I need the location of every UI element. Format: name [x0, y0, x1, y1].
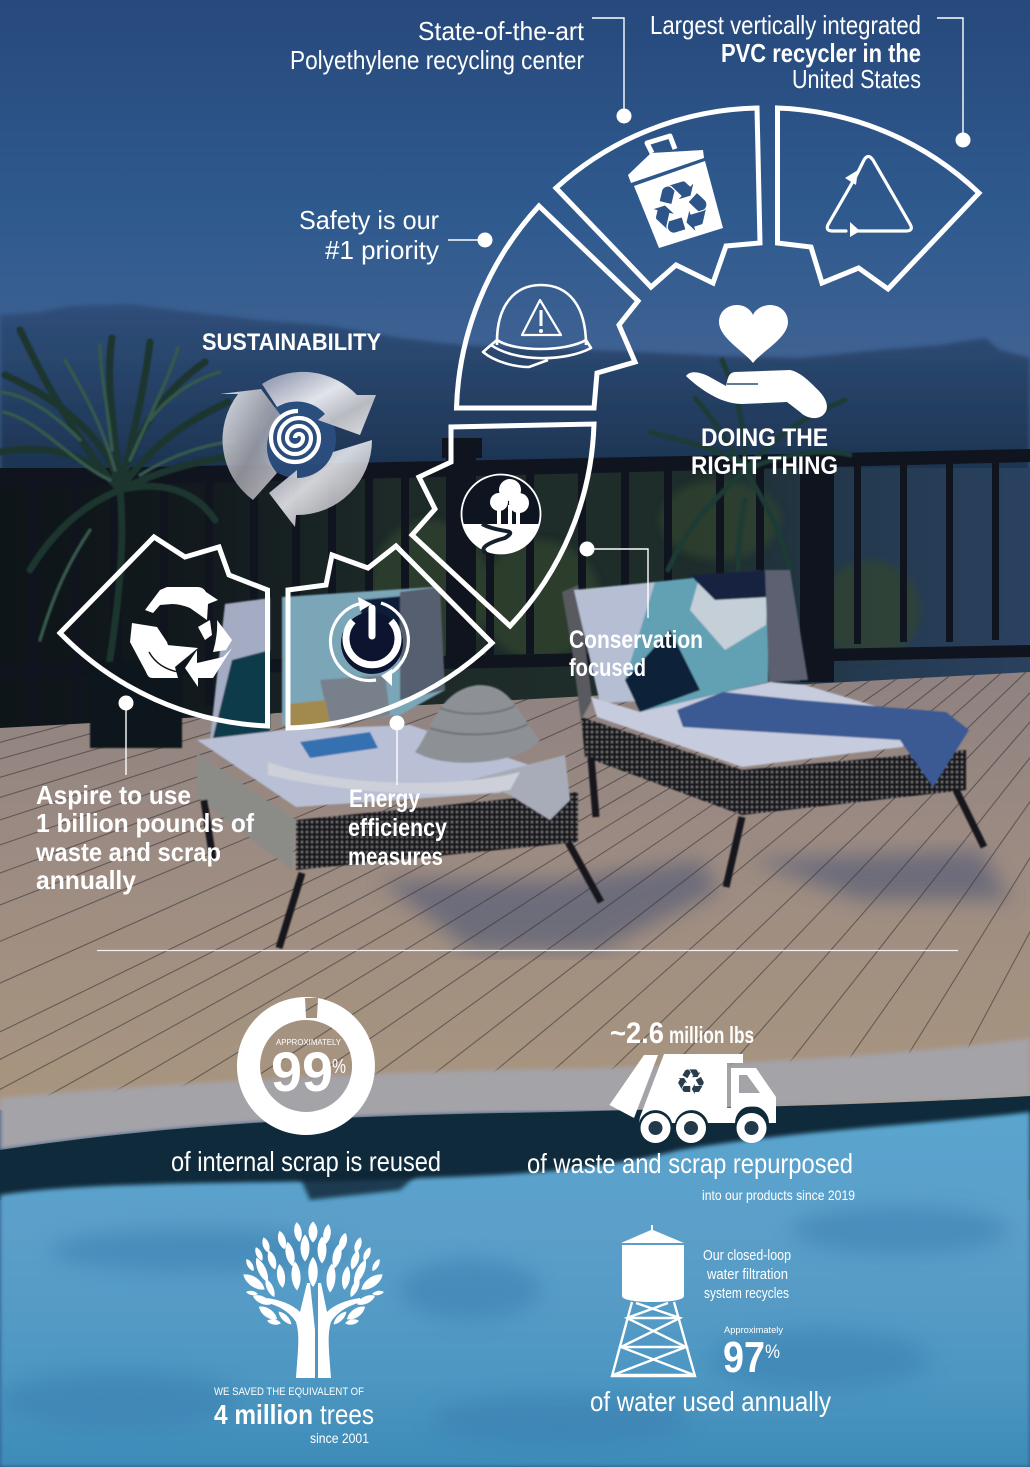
text: aspire: annually — [36, 865, 137, 895]
stat: water recycling: Approximately — [724, 1325, 784, 1335]
connector: polyethylene — [592, 18, 632, 124]
connector: PVC recycler — [937, 18, 970, 148]
stat: 99 percent scrap: of internal scrap is reused — [171, 1146, 441, 1177]
stat: waste repurposed truck: ~2.6 — [610, 1017, 664, 1050]
deck — [0, 672, 1030, 1110]
text: conservation focused: focused — [569, 654, 646, 682]
icon: garbage truck: ♻ — [675, 1063, 707, 1103]
segment: waste and scrap — [60, 537, 268, 726]
icon: garbage truck — [610, 1054, 776, 1143]
icon: power with cycle arrows — [330, 597, 408, 686]
text: conservation focused: Conservation — [569, 626, 703, 654]
stat: water recycling: of water used annually — [590, 1386, 831, 1417]
stat: water recycling — [590, 1225, 831, 1417]
stat: waste repurposed truck: of waste and scrap repurposed — [527, 1148, 853, 1179]
stat: 4 million trees: trees — [320, 1399, 374, 1430]
stat: water recycling: system recycles — [704, 1285, 789, 1302]
stat: 4 million trees: WE SAVED THE EQUIVALENT OF — [214, 1386, 364, 1398]
icon: recycle bin: ♻ — [637, 159, 724, 259]
heading: doing the right thing: RIGHT THING — [691, 452, 838, 480]
stat: 99 percent scrap: APPROXIMATELY — [276, 1038, 342, 1047]
stat: waste repurposed truck: million lbs — [669, 1022, 754, 1048]
text: aspire — [35, 780, 254, 895]
segment: recycling bin — [556, 108, 760, 287]
icon: globe recycle — [130, 587, 232, 687]
segment: energy — [288, 546, 492, 728]
text: energy efficiency: measures — [348, 843, 443, 871]
connector: conservation — [580, 542, 648, 618]
text: safety: Safety is our — [299, 205, 439, 235]
text: polyethylene center — [290, 16, 585, 75]
text: PVC recycler: Largest vertically integrated — [650, 10, 921, 40]
icon: sustainability cycle — [220, 372, 376, 527]
icon: water tower — [612, 1225, 695, 1376]
heading: doing the right thing: DOING THE — [701, 424, 828, 452]
text: conservation focused — [569, 626, 703, 682]
text: PVC recycler: United States — [792, 64, 921, 94]
stat: waste repurposed truck: into our products since 2019 — [702, 1187, 855, 1203]
text: aspire: 1 billion pounds of — [36, 808, 254, 838]
text: polyethylene center: Polyethylene recycling center — [290, 45, 584, 75]
right lounge chair — [562, 570, 984, 887]
text: PVC recycler: PVC recycler in the — [721, 38, 921, 68]
text: energy efficiency: efficiency — [348, 814, 447, 842]
divider — [97, 950, 958, 952]
heading: doing the right thing — [691, 424, 838, 480]
segment: safety helmet — [456, 206, 638, 408]
stat: 99 percent scrap — [171, 997, 441, 1177]
railing — [0, 449, 1030, 488]
icon: heart in hand — [686, 305, 827, 418]
text: aspire: waste and scrap — [35, 837, 221, 867]
connector: energy — [390, 716, 404, 785]
stat: 4 million trees — [214, 1222, 385, 1446]
icon: triangle arrows — [827, 156, 911, 237]
text: PVC recycler — [650, 10, 921, 94]
stat: water recycling: water filtration — [706, 1266, 788, 1283]
icon: tree and river — [462, 474, 540, 554]
stat: 4 million trees: since 2001 — [310, 1430, 369, 1446]
text: safety: #1 priority — [325, 235, 439, 265]
coping — [0, 1038, 1030, 1150]
palms — [0, 330, 850, 690]
stat: 4 million trees: 4 million — [214, 1399, 313, 1430]
stat: water recycling: Our closed-loop — [703, 1247, 791, 1264]
connector: waste and scrap — [118, 696, 134, 775]
stat: 99 percent scrap: % — [332, 1056, 346, 1078]
segment: recycling triangle — [778, 108, 979, 289]
icon: hard hat — [483, 285, 591, 367]
left lounge chair — [197, 587, 601, 948]
text: safety — [299, 205, 439, 265]
stat: water recycling: 97 — [723, 1333, 765, 1382]
icon: tree of hands — [241, 1222, 385, 1378]
text: energy efficiency — [348, 785, 447, 871]
stat: 99 percent scrap: 99 — [271, 1040, 333, 1103]
text: energy efficiency: Energy — [349, 785, 420, 813]
heading: sustainability: SUSTAINABILITY — [202, 329, 381, 356]
stat: waste repurposed truck — [527, 1017, 855, 1203]
segment: conservation — [412, 424, 594, 626]
stat: water recycling: % — [765, 1342, 780, 1363]
connector: safety — [448, 232, 492, 248]
text: aspire: Aspire to use — [36, 780, 191, 810]
text: polyethylene center: State-of-the-art — [418, 16, 585, 46]
